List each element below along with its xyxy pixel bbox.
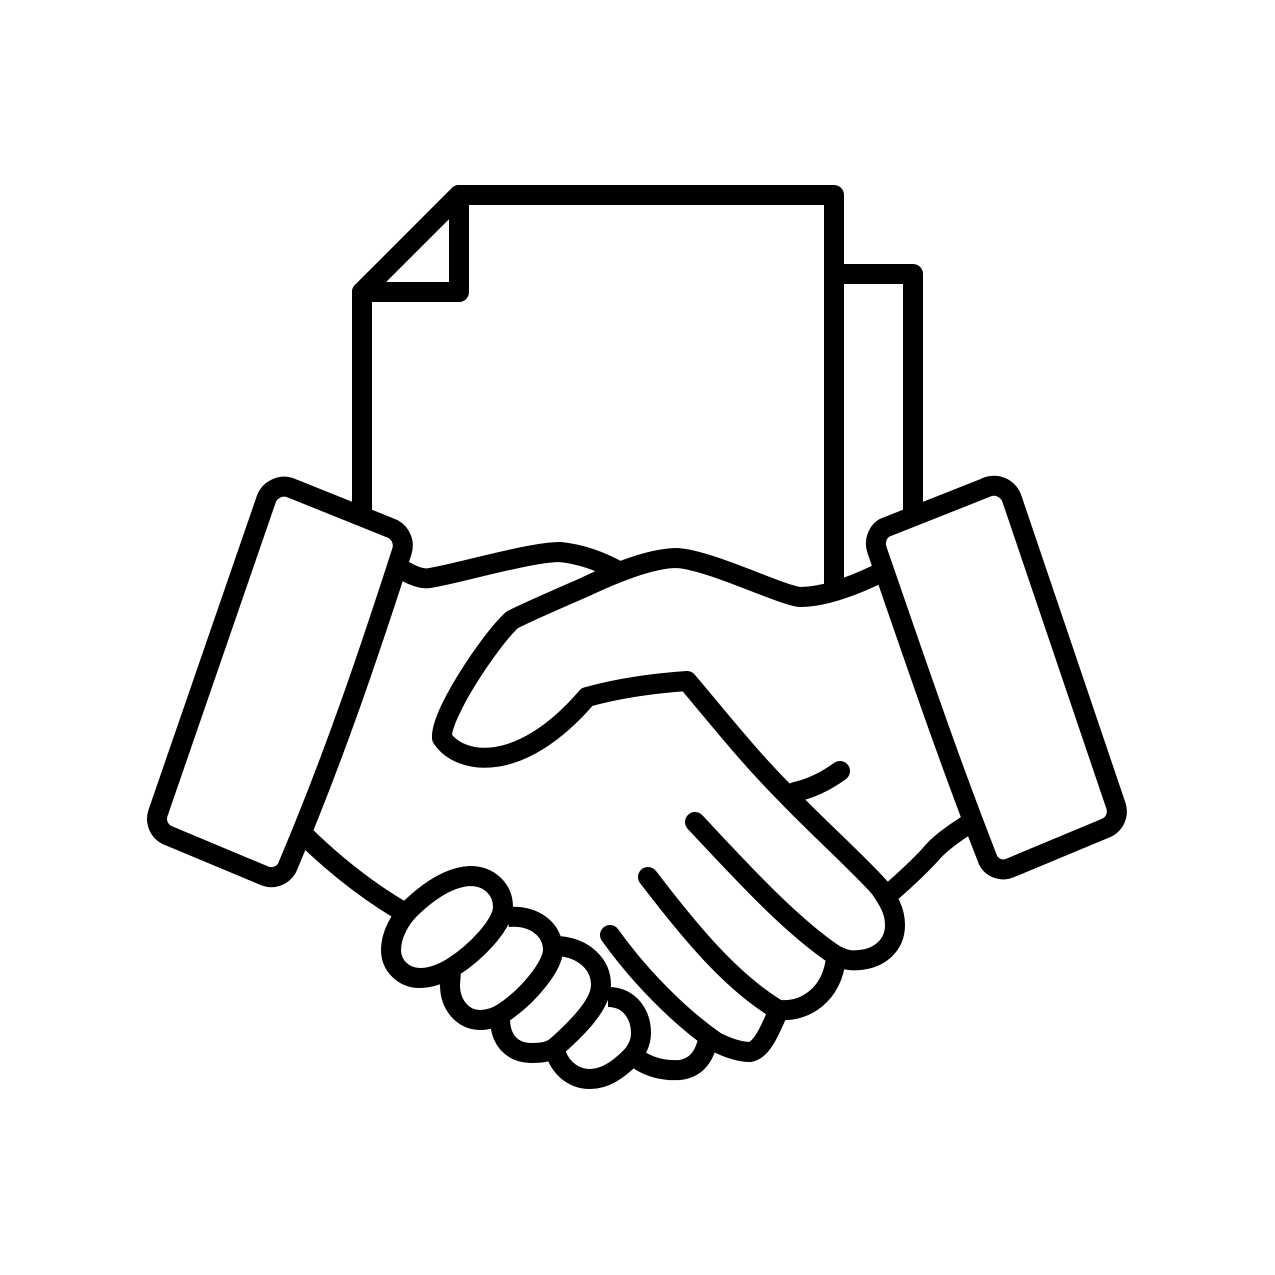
- left shirt cuff: [157, 487, 403, 877]
- back hand fingers: [391, 876, 641, 1079]
- front hand with thumb: [442, 558, 895, 960]
- back hand upper edge: [403, 552, 620, 578]
- left wrist: [304, 835, 400, 910]
- thumb crease: [795, 771, 840, 792]
- finger lines of front hand: [610, 877, 836, 1052]
- document: front page with folded corner: [362, 195, 834, 584]
- right shirt cuff: [876, 486, 1117, 869]
- right wrist: [890, 825, 967, 893]
- document: back page: [834, 274, 913, 515]
- palm lower edge: [636, 1044, 707, 1070]
